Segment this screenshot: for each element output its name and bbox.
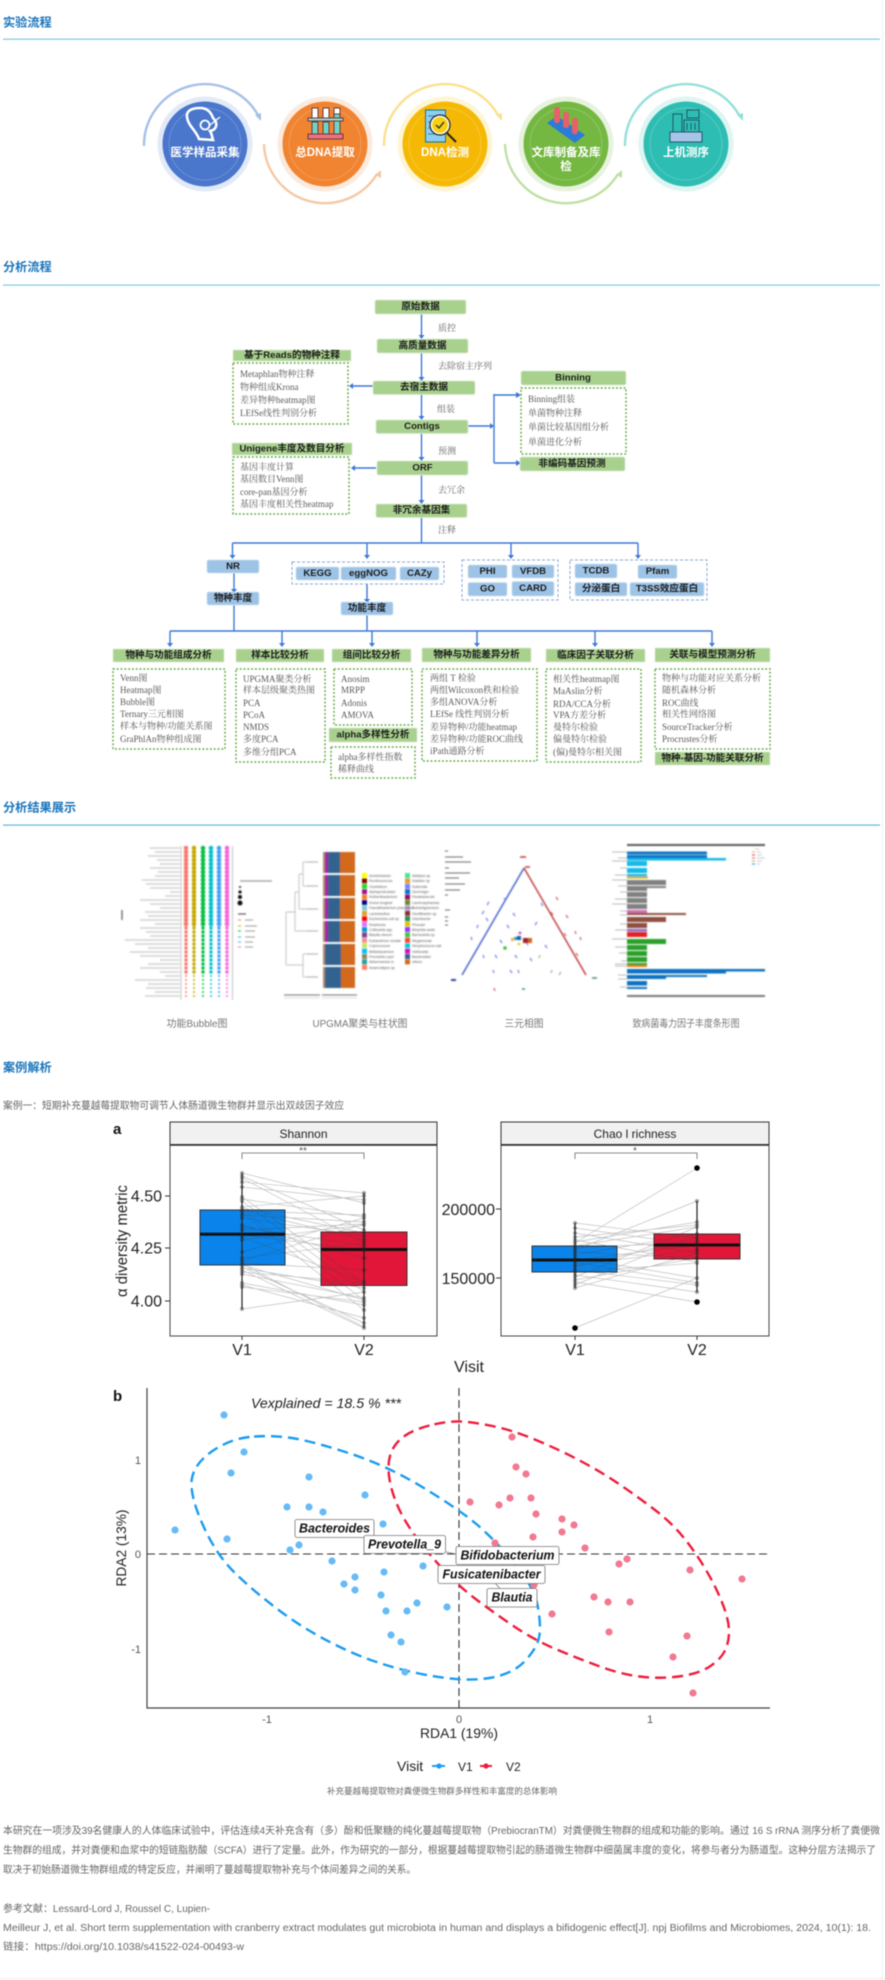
panel: 样本比较分析: 样本层级聚类热图 [243,684,315,695]
step 2: 总DNA提取: 总DNA提取 [295,145,355,159]
label: Bacteroides: Bacteroides [299,1522,370,1536]
chart: functional bubble thumbnail [122,846,272,1000]
legend: taxa: Barnesiella sp [412,933,435,937]
panel: 物种与功能差异分析: 多组ANOVA分析 [430,696,497,707]
captions: result thumbnails: 三元相图 [504,1017,544,1030]
panel: alpha多样性分析: alpha多样性分析 [336,728,410,740]
chart b: RDA ordination [113,1388,770,1774]
legend: taxa: Megamonas [412,939,432,943]
panel: 临床因子关联分析: RDA/CCA分析 [553,698,611,709]
panel: Chao1 richness [442,1122,769,1359]
panel: 样本比较分析: PCoA [243,710,266,720]
panel: 物种与功能差异分析 [422,648,537,761]
legend: taxa: Escherichia coli sp [369,917,399,921]
label: Blautia: Blautia [492,1590,533,1604]
panel: Chao1 richness: V2 [687,1342,707,1359]
chart b: RDA ordination: RDA1 (19%) [420,1725,498,1741]
panel: 物种与功能差异分析: 差异物种/功能ROC曲线 [430,733,523,744]
panel: 物种与功能差异分析: LEfSe 线性判别分析 [430,708,509,719]
legend: Visit: V2 [506,1760,521,1774]
legend: taxa: Subdoligranulum [412,906,439,910]
panel: 物种与功能组成分析: 物种与功能组成分析 [125,649,212,661]
legend: taxa: Alphaproteobact [369,890,395,894]
axis ticks and labels [131,1455,653,1726]
node: 非冗余基因集: 非冗余基因集 [393,504,451,516]
node: 非编码基因预测 [520,457,625,471]
heading: 分析结果展示: 分析结果展示 [3,800,76,814]
step 1: 医学样品采集: 医学样品采集 [170,145,240,159]
panel: Binning [521,371,626,454]
node: 去宿主数据: 去宿主数据 [400,381,448,393]
panel: Shannon: ** [299,1146,307,1157]
legend: taxa: Prevotella copri [369,955,394,959]
node: 高质量数据: 高质量数据 [399,340,447,352]
panel: 组间比较分析: AMOVA [341,710,374,720]
node: 功能丰度 [341,602,393,615]
panel: Binning: 单菌物种注释 [528,407,582,418]
node: ORF [377,461,468,475]
legend: Visit: V1 [458,1760,473,1774]
legend: taxa: Akkermansia m. [369,960,395,964]
group: KEGG eggNOG CAZy: eggNOG [349,568,388,579]
group: TCDB Pfam 分泌蛋白 T3SS: TCDB [583,566,609,576]
axis ticks and labels: 1 [135,1455,141,1467]
edge labels: 质控 [438,322,456,333]
legend: taxa: Sutterella [412,885,427,889]
text block: reference: 参考文献：Lessard-Lord J, Roussel C, Lupien- [3,1902,210,1915]
captions: result thumbnails [166,1017,740,1030]
node: 高质量数据 [377,339,468,353]
panel: 临床因子关联分析: MaAslin分析 [553,685,603,696]
panel: 物种与功能组成分析: Bubble图 [120,697,155,707]
chart: ternary plot thumbnail [445,851,597,991]
step 1: 医学样品采集 [144,84,261,192]
panel: 物种与功能组成分析: Heatmap图 [120,685,162,695]
panel: 样本比较分析: PCA [243,698,261,708]
panel: Unigene丰度及数目分析: 基因丰度相关性heatmap [240,498,334,509]
panel: 物种与功能组成分析: 样本与物种/功能关系图 [120,720,213,731]
edge labels: 预测 [438,445,456,456]
legend: taxa: Blautia obeum [369,933,392,937]
text block: study summary [3,1824,880,1876]
icon: test tubes [308,108,343,139]
label: Blautia [487,1588,537,1607]
edge labels: 组装 [437,403,455,414]
step 4: 文库制备及库检 [505,96,622,203]
panel: Chao1 richness: Chao l richness [594,1127,676,1141]
panel: 临床因子关联分析: 临床因子关联分析 [557,649,634,661]
panel: Chao1 richness: * [633,1146,637,1157]
legend: taxa: Faecalibacterium prausnitzii [369,906,414,910]
group: PHI VFDB GO CARD: GO [480,584,495,594]
panel: 临床因子关联分析 [546,649,645,762]
process: experiment flow circles [144,84,743,203]
panel: 样本比较分析: NMDS [243,722,269,732]
panel: alpha多样性分析: 稀释曲线 [338,763,374,774]
legend: taxa: Roseburia [369,923,385,927]
legend: taxa: Ruminococcus [369,879,393,883]
legend: taxa: Eubacterium rectale [369,939,401,943]
axis ticks and labels: 0 [456,1714,462,1726]
panel: 组间比较分析: 组间比较分析 [343,649,401,661]
panel: 关联与模型预测分析: 相关性网络图 [662,708,716,719]
node: Contigs: Contigs [404,421,440,432]
legend: taxa: Odoribacter [412,917,432,921]
text block: study summary: 生物群的组成，并对粪便和血浆中的短链脂肪酸（SCFA）进行了定量。此外，作为研究的一部分，根据蔓越莓提取物引起的肠道微生物群中细菌属丰度的变化，将参与者分为肠道型。这种分层方法揭示了 [3,1844,876,1856]
axis ticks and labels: 0 [135,1549,141,1561]
legend: Visit: Visit [397,1758,423,1774]
node: 物种-基因-功能关联分析: 物种-基因-功能关联分析 [661,752,764,764]
icon: document with magnifier [426,110,456,142]
panel: 物种与功能差异分析: 两组Wilcoxon秩和检验 [430,684,519,695]
node: 功能丰度: 功能丰度 [348,602,387,614]
chart: UPGMA dendrogram and stacked bars thumbnail [284,852,441,998]
panel: 组间比较分析: MRPP [341,685,365,695]
panel: 临床因子关联分析: 相关性heatmap图 [553,673,620,684]
axis ticks and labels: -1 [262,1714,272,1726]
group: TCDB Pfam 分泌蛋白 T3SS: T3SS效应蛋白 [636,582,698,594]
heading: 分析流程: 分析流程 [3,259,52,274]
group: KEGG eggNOG CAZy [292,562,444,584]
panel: Unigene丰度及数目分析: 基因丰度计算 [240,461,294,472]
legend: taxa [362,873,441,970]
text block: reference: 链接：https://doi.org/10.1038/s41522-024-00493-w [3,1940,245,1953]
captions: result thumbnails: 功能Bubble图 [166,1017,228,1030]
legend: taxa: Oscillibacter sp [412,912,436,916]
legend: taxa: Gemmiger [412,890,430,894]
axis label: Visit: Visit [454,1359,485,1376]
axis ticks and labels: -1 [131,1644,141,1656]
panel: 样本比较分析: 多度PCA [243,733,279,744]
legend: taxa: Bifidobacterium [369,950,394,954]
panel: 物种与功能差异分析: 两组 T 检验 [430,672,476,683]
panel: 临床因子关联分析: (偏)曼特尔相关图 [553,746,622,757]
step 2: 总DNA提取 [264,96,381,203]
group: PHI VFDB GO CARD: VFDB [520,566,546,577]
panel: alpha多样性分析 [329,728,417,778]
panel: 临床因子关联分析: 偏曼特尔检验 [553,733,607,744]
icon: throat swab [187,108,220,140]
legend: taxa: Streptococcus sali [412,944,441,948]
panel: 临床因子关联分析: VPA方差分析 [553,709,606,720]
edge labels: 去冗余 [438,484,465,495]
step 5: 上机测序: 上机测序 [663,145,709,159]
group: TCDB Pfam 分泌蛋白 T3SS: 分泌蛋白 [582,582,620,594]
step 3: DNA检测: DNA检测 [421,145,469,159]
panel: 样本比较分析: UPGMA聚类分析 [243,673,312,684]
node: NR [207,560,259,573]
axis label: α diversity metric: α diversity metric [114,1185,131,1297]
text block: study summary: 本研究在一项涉及39名健康人的人体临床试验中，评估连续4天补充含有（多）酚和低聚糖的纯化蔓越莓提取物（PrebiocranTM）对粪便微生物群的组成和功能的影响。通过 16 S rRNA 测序分析了粪便微 [3,1824,880,1837]
panel: 物种与功能组成分析: Venn图 [120,673,148,683]
panel: Chao1 richness: 200000 [442,1202,495,1219]
panel: 关联与模型预测分析 [655,648,770,749]
panel: 物种与功能组成分析: GraPhlAn物种组成图 [120,733,202,744]
node: ORF: ORF [412,462,433,474]
step 5: 上机测序 [625,84,743,192]
group: KEGG eggNOG CAZy: KEGG [303,568,332,579]
legend: taxa: Veillonella [412,950,428,954]
group: PHI VFDB GO CARD [462,560,558,600]
node: 原始数据: 原始数据 [401,300,440,312]
axis ticks and labels: 1 [647,1714,653,1726]
node: 原始数据 [375,300,466,314]
edge labels: 注释 [438,524,456,535]
node: 去宿主数据 [373,381,475,394]
annotation: variance explained: Vexplained = 18.5 % *** [251,1395,402,1411]
group: TCDB Pfam 分泌蛋白 T3SS [570,560,707,600]
legend: Visit [397,1758,521,1774]
node: NR: NR [226,561,240,572]
chart b: RDA ordination: RDA2 (13%) [113,1510,129,1586]
figure caption: 补充蔓越莓提取物对粪便微生物群多样性和丰富度的总体影响 [327,1786,557,1796]
label: Fusicatenibacter: Fusicatenibacter [442,1568,542,1582]
panel: Binning: Binning组装 [528,393,575,404]
captions: result thumbnails: UPGMA聚类与柱状图 [312,1017,408,1030]
step 4: 文库制备及库检: 文库制备及库 [532,145,601,159]
panel: 关联与模型预测分析: 物种与功能对应关系分析 [662,672,761,683]
group: KEGG eggNOG CAZy: CAZy [407,568,433,579]
legend: taxa: Bacteroides [412,955,431,959]
panel: Chao1 richness: 150000 [442,1271,495,1288]
panel: Binning: Binning [555,372,591,384]
panel: Shannon: 4.25 [131,1240,162,1258]
legend: taxa: Collinsella spp [369,928,392,932]
panel: 样本比较分析 [236,649,325,762]
legend: taxa: Phocaei [412,923,425,927]
node: 物种丰度 [207,592,259,605]
panel: 关联与模型预测分析: SourceTracker分析 [662,721,733,732]
panel: 组间比较分析: Anosim [341,674,370,684]
edge labels [437,322,492,535]
chart b: RDA ordination: b [113,1388,122,1405]
panel: 基于Reads的物种注释: 物种组成Krona [240,381,298,392]
legend: taxa: others [412,960,422,964]
group: TCDB Pfam 分泌蛋白 T3SS: Pfam [646,566,669,577]
label: Prevotella_9: Prevotella_9 [368,1538,441,1552]
panel: 物种与功能差异分析: 差异物种/功能heatmap [430,721,517,732]
label: Bifidobacterium: Bifidobacterium [460,1548,554,1562]
legend: taxa: Parabacteroid [412,895,434,899]
panel: Unigene丰度及数目分析: Unigene丰度及数目分析 [239,442,345,454]
ellipse: V2 [388,1421,729,1678]
panel: 基于Reads的物种注释: LEfSe线性判别分析 [240,407,317,418]
arrows: main pipeline [167,314,715,647]
chart a: alpha diversity boxplots [113,1121,769,1376]
step 3: DNA检测 [384,84,502,192]
legend: taxa: Bilophila wads [412,928,435,932]
panel: 基于Reads的物种注释: 差异物种heatmap图 [240,394,316,405]
edge labels: 去除宿主序列 [438,360,492,371]
step 4: 文库制备及库检: 检 [560,159,572,173]
panel: 样本比较分析: 多维分组PCA [243,746,297,757]
panel: 物种与功能差异分析: iPath通路分析 [430,745,485,756]
legend: taxa: Lactobacillus [369,912,390,916]
panel: 物种与功能差异分析: 物种与功能差异分析 [433,648,520,660]
panel: Shannon: 4.50 [131,1188,162,1206]
panel: Shannon: V2 [354,1342,374,1359]
legend: taxa: Clostridium [369,885,387,889]
panel: 样本比较分析: 样本比较分析 [251,649,309,661]
group: PHI VFDB GO CARD: PHI [480,566,496,577]
captions: result thumbnails: 致病菌毒力因子丰度条形图 [632,1017,740,1030]
panel: Shannon: 4.00 [131,1294,162,1310]
panel: 组间比较分析: Adonis [341,698,368,708]
flowchart: analysis pipeline [113,300,770,778]
icon: library tray [547,107,585,143]
panel: 基于Reads的物种注释 [233,349,351,424]
group: PHI VFDB GO CARD: CARD [519,583,547,594]
legend: taxa: Alistipes sp [412,874,430,878]
legend: taxa: Anaerostipes sp [369,966,395,970]
text block: study summary: 取决于初始肠道微生物群组成的特定反应，并阐明了蔓越莓提取物补充与个体间差异之间的关系。 [3,1863,416,1876]
panel: Shannon: Shannon [279,1127,328,1141]
points: V2 [470,1437,742,1693]
panel: Unigene丰度及数目分析: core-pan基因分析 [240,486,307,497]
heading: 实验流程: 实验流程 [3,14,52,30]
panel: Binning: 单菌进化分析 [528,436,582,447]
panel: Shannon [131,1122,437,1359]
panel: 物种与功能组成分析 [113,649,225,749]
legend: taxa: Lachnospiraceae [412,901,439,905]
panel: Binning: 单菌比较基因组分析 [528,421,609,432]
points: V1 [175,1415,447,1672]
node: 非编码基因预测: 非编码基因预测 [538,458,606,470]
heading: 案例解析: 案例解析 [3,1060,52,1074]
panel: 物种与功能组成分析: Ternary三元相图 [120,708,184,719]
panel: 基于Reads的物种注释: Metaphlan物种注释 [240,368,314,379]
node: 非冗余基因集 [376,504,467,518]
node: Contigs [376,420,468,434]
legend: taxa: Dialister sp [412,879,430,883]
panel: Unigene丰度及数目分析: 基因数目Venn图 [240,473,304,484]
case title: 案例一：短期补充蔓越莓提取物可调节人体肠道微生物群并显示出双歧因子效应 [3,1099,344,1112]
panel: 组间比较分析 [332,649,412,725]
legend: taxa: Acinetobacter [369,874,392,878]
legend: taxa: Coprococcus [369,944,390,948]
panel: 关联与模型预测分析: 关联与模型预测分析 [669,648,756,660]
legend: taxa: Dorea longicat [369,901,392,905]
ellipse: V1 [191,1436,540,1680]
panel: 关联与模型预测分析: ROC曲线 [662,697,699,708]
panel: Unigene丰度及数目分析 [232,442,352,514]
icon: sequencer machine [670,110,702,142]
panel: 关联与模型预测分析: 随机森林分析 [662,684,716,695]
panel: 关联与模型预测分析: Procrustes分析 [662,733,718,744]
chart a: alpha diversity boxplots: a [113,1121,122,1138]
panel: alpha多样性分析: alpha多样性指数 [338,751,402,762]
panel: Shannon: V1 [232,1342,252,1359]
panel: 基于Reads的物种注释: 基于Reads的物种注释 [244,349,340,361]
legend: taxa: Ruthenibacterium [369,895,397,899]
node: 物种丰度: 物种丰度 [214,592,253,604]
text block: reference [3,1902,871,1953]
panel: 临床因子关联分析: 曼特尔检验 [553,721,598,732]
text block: reference: Meilleur J, et al. Short term supplementation with cranberry extract modulates gut microbiota in human and displays a bifidogenic effect[J]. npj Biofilms and Microbiomes, 2024, 10(1): 18. [3,1923,871,1934]
panel: Chao1 richness: V1 [565,1342,585,1359]
chart: virulence factor bar thumbnail [612,844,765,997]
